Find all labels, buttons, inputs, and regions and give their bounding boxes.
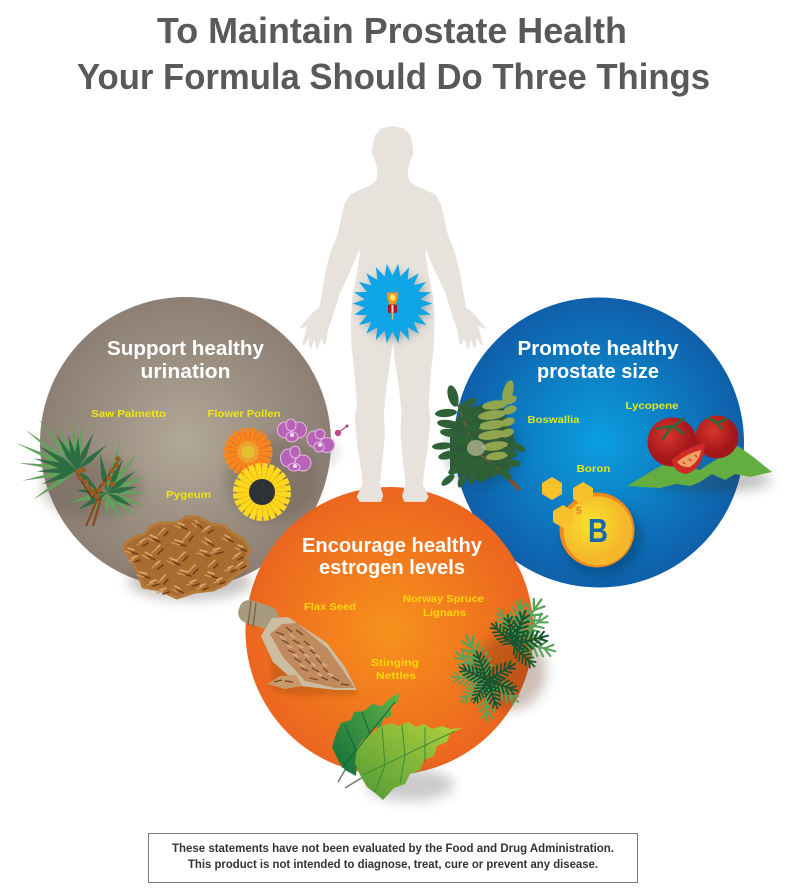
- heading: promote healthy prostate size: [518, 337, 679, 383]
- icon: boron vitamin B: [542, 477, 642, 574]
- icon: boron vitamin B: 5: [576, 506, 582, 517]
- disclaimer box: [148, 834, 638, 882]
- label: Norway Spruce Lignans: Norway Spruce: [403, 593, 484, 605]
- icon: saw palmetto: [14, 418, 148, 526]
- label: Stinging Nettles: [371, 657, 419, 682]
- panel: promote healthy prostate size circle: [454, 298, 744, 588]
- heading: encourage healthy estrogen levels: estrogen levels: [319, 556, 465, 579]
- icon: flower pollen: [226, 419, 348, 522]
- panel: encourage healthy estrogen levels circle: [246, 487, 534, 775]
- label: Norway Spruce Lignans: Lignans: [423, 607, 466, 619]
- label: Flower Pollen: Flower Pollen: [208, 408, 280, 420]
- label: Saw Palmetto: Saw Palmetto: [91, 408, 166, 420]
- label: Norway Spruce Lignans: [403, 593, 484, 619]
- label: Boron: Boron: [576, 463, 610, 475]
- heading: support healthy urination: urination: [140, 360, 230, 383]
- icon: stinging nettle leaves: [332, 693, 463, 801]
- label: Flax Seed: Flax Seed: [304, 601, 356, 613]
- heading: encourage healthy estrogen levels: [302, 534, 483, 579]
- disclaimer box: These statements have not been evaluated by the Food and Drug Administration.: [172, 843, 614, 855]
- title: [77, 10, 710, 97]
- heading: encourage healthy estrogen levels: Encourage healthy: [302, 534, 483, 557]
- title: To Maintain Prostate Health: [157, 10, 627, 51]
- icon: boron vitamin B: B: [588, 512, 608, 549]
- label: Lycopene: Lycopene: [626, 400, 679, 412]
- starburst with prostate icon: [352, 264, 434, 346]
- icon: flax seed scoop: [236, 597, 358, 696]
- heading: promote healthy prostate size: prostate size: [537, 360, 659, 383]
- icon: norway spruce: [449, 593, 558, 722]
- label: Pygeum: Pygeum: [166, 489, 211, 501]
- human body silhouette: [301, 127, 484, 501]
- panel: support healthy urination circle: [40, 297, 331, 588]
- label: Boswallia: Boswallia: [528, 414, 580, 426]
- icon: lycopene tomatoes: [627, 416, 772, 492]
- heading: support healthy urination: Support healthy: [107, 337, 265, 360]
- disclaimer box: This product is not intended to diagnose, treat, cure or prevent any disease.: [188, 859, 598, 871]
- heading: support healthy urination: [107, 337, 265, 383]
- label: Stinging Nettles: Nettles: [376, 670, 416, 682]
- heading: promote healthy prostate size: Promote healthy: [518, 337, 679, 360]
- label: Stinging Nettles: Stinging: [371, 657, 419, 669]
- icon: boswellia branch: [432, 379, 527, 490]
- title: Your Formula Should Do Three Things: [77, 56, 710, 97]
- icon: pygeum bark pile: [123, 517, 252, 600]
